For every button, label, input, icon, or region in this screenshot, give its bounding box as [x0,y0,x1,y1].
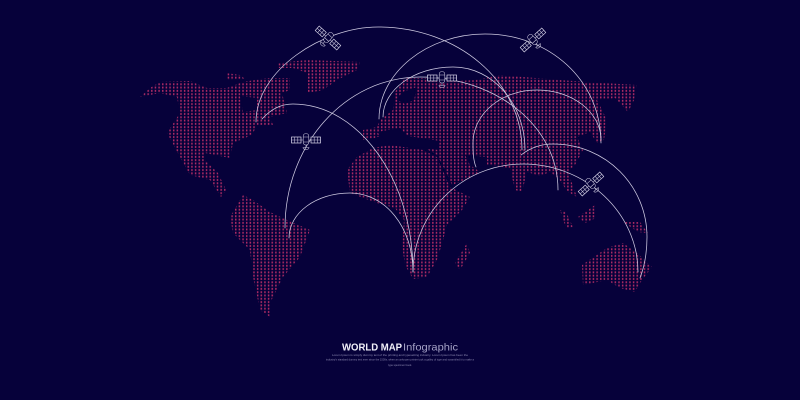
Mediterranean Sea [377,128,440,150]
title: Infographic [403,342,458,354]
arc: India to Australia [521,144,647,278]
arc: South America to South Africa [289,193,413,272]
satellite: top right [518,25,550,57]
arc: North America to South Africa [262,104,413,272]
title [342,342,458,354]
arc: Europe to East Asia [379,34,601,143]
description text: type specimen book. [388,363,412,367]
continent: Africa [347,145,470,279]
arc: South Africa to Australia [413,164,638,272]
Hudson Bay [240,96,257,112]
description text: Lorem Ipsum is simply dummy text of the printing and typesetting industry. Lorem Ipsum has been the [332,353,468,357]
description text [326,353,474,367]
continent: Australia [582,243,652,292]
continent: Arctic islands [226,73,245,80]
satellite: South-East Asia [576,169,608,201]
island: Madagascar [455,243,470,270]
description text: industry's standard dummy text ever since the 1500s, when an unknown printer took a galley of type and scrambled it to make a [326,358,474,362]
Persian Gulf [465,155,487,167]
arc: South America to South-East Asia [285,77,558,228]
continent: Eurasia [363,75,637,197]
island: Borneo [578,205,596,223]
satellites [292,23,608,201]
satellite: centre [428,72,456,88]
satellite: Atlantic [292,134,320,150]
island: New Guinea [623,222,648,233]
title: WORLD MAP [342,342,402,354]
connection arcs [256,27,647,278]
dotted world map [140,60,652,317]
inland seas [240,87,597,167]
island: Sumatra [560,210,573,228]
arc: Arabia to East Asia [473,90,601,167]
continent: Greenland [277,60,360,93]
satellite: top left [311,23,343,55]
Baltic Sea [397,87,417,104]
continent: South America [230,195,310,317]
arc: Europe to Central Asia [383,67,525,150]
Sea of Okhotsk [577,132,597,146]
continent: North America [140,78,290,197]
arc: North America to Asia, highest [256,27,522,150]
